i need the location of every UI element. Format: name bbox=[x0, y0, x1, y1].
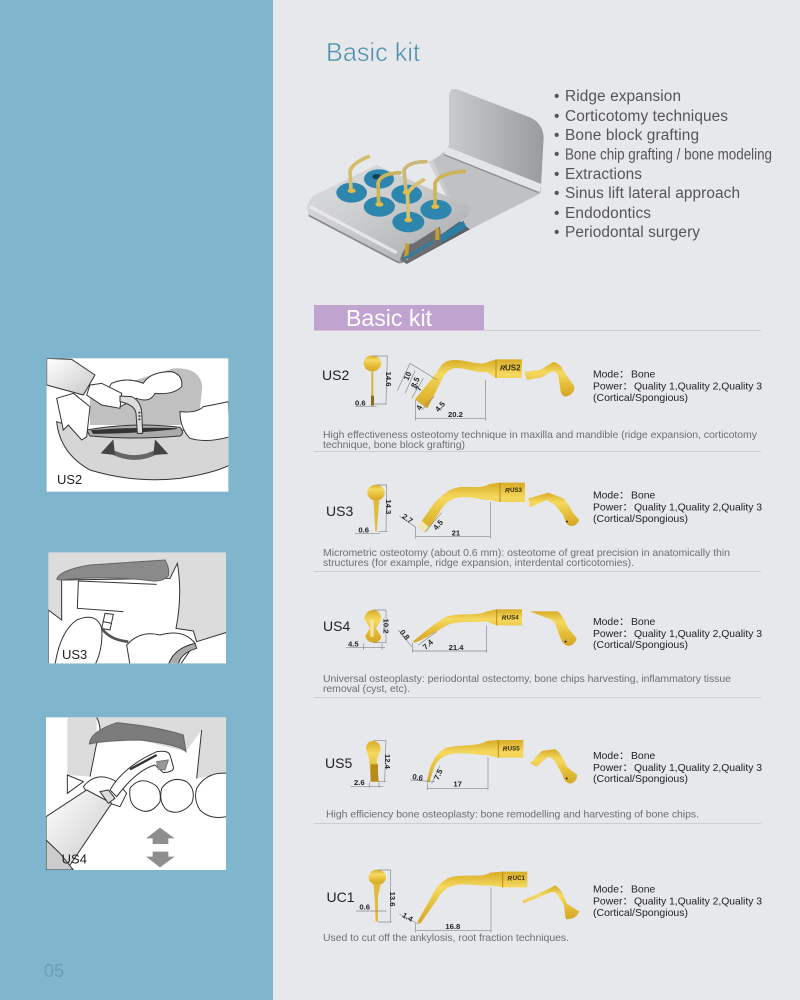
US5 tip drawings and dimensions: 17 bbox=[453, 780, 462, 789]
product image: kit tray bbox=[307, 89, 544, 264]
US4 specs: Quality 1,Quality 2,Quality 3 bbox=[634, 629, 762, 640]
US4 tip drawings and dimensions: US4 bbox=[507, 614, 519, 621]
UC1 specs bbox=[593, 884, 762, 919]
US2 tip drawings and dimensions bbox=[355, 355, 574, 421]
US5 label: US5 bbox=[325, 755, 352, 771]
US3 specs: Quality 1,Quality 2,Quality 3 bbox=[634, 502, 762, 514]
US2 tip drawings and dimensions: 0.6 bbox=[355, 398, 366, 407]
illustration: US4 bbox=[46, 717, 227, 870]
US5 specs: Bone bbox=[631, 751, 655, 762]
US4 tip drawings and dimensions bbox=[346, 609, 577, 653]
US4 description: Universal osteoplasty: periodontal ostectomy, bone chips harvesting, inflammatory tissue bbox=[323, 673, 731, 685]
US3 tip drawings and dimensions: R bbox=[505, 488, 510, 495]
UC1 tip drawings and dimensions: 0.6 bbox=[359, 902, 370, 911]
US3 tip drawings and dimensions: 14.3 bbox=[384, 499, 393, 514]
US3 specs: ： bbox=[619, 490, 629, 502]
US2 tip drawings and dimensions: 10 bbox=[402, 370, 413, 382]
illustration: US2: US2 bbox=[57, 472, 82, 487]
US4 specs: ： bbox=[622, 629, 633, 640]
US5 tip drawings and dimensions: 12.4 bbox=[383, 754, 392, 770]
UC1 tip drawings and dimensions: R bbox=[507, 876, 512, 883]
UC1 specs: ： bbox=[619, 884, 629, 896]
illustration: US3 bbox=[48, 552, 227, 665]
US2 tip drawings and dimensions: US2 bbox=[505, 364, 521, 373]
UC1 specs: Bone bbox=[631, 884, 655, 896]
illustration: US4: US4 bbox=[62, 851, 87, 866]
indications list: Bone block grafting bbox=[565, 127, 699, 144]
indications list: • bbox=[554, 108, 559, 125]
indications list: Periodontal surgery bbox=[565, 224, 700, 241]
US5 tip drawings and dimensions: R bbox=[503, 746, 508, 753]
indications list: • bbox=[554, 205, 559, 222]
US2 specs: Quality 1,Quality 2,Quality 3 bbox=[634, 382, 762, 392]
US2 tip drawings and dimensions: 4.5 bbox=[433, 399, 448, 414]
indications list: Bone chip grafting / bone modeling bbox=[565, 146, 772, 164]
US4 tip drawings and dimensions: 10.2 bbox=[381, 619, 390, 634]
row: US3 bbox=[323, 483, 762, 569]
US2 tip drawings and dimensions: 20.2 bbox=[448, 410, 463, 419]
indications list: Ridge expansion bbox=[565, 88, 681, 105]
page number: 05 bbox=[44, 961, 64, 981]
US4 specs: Bone bbox=[631, 617, 655, 628]
US4 description: removal (cyst, etc). bbox=[323, 683, 410, 695]
US2 specs: ： bbox=[619, 370, 629, 380]
US3 description bbox=[323, 547, 730, 569]
US5 tip drawings and dimensions: 7.5 bbox=[432, 767, 445, 781]
US2 specs bbox=[593, 370, 762, 404]
US3 specs: Bone bbox=[631, 490, 655, 502]
US2 tip drawings and dimensions: 7 bbox=[414, 385, 424, 393]
section heading bar bbox=[314, 305, 484, 331]
US4 tip drawings and dimensions: 21.4 bbox=[449, 643, 464, 652]
UC1 specs: Power bbox=[593, 896, 623, 908]
US5 tip drawings and dimensions: 0.6 bbox=[412, 772, 424, 783]
US3 label: US3 bbox=[326, 503, 353, 519]
illustration: US3: US3 bbox=[62, 647, 87, 662]
US5 specs: Mode bbox=[593, 751, 619, 762]
indications list: • bbox=[554, 127, 559, 144]
UC1 tip drawings and dimensions: 1.4 bbox=[401, 911, 415, 924]
row: UC1 bbox=[323, 870, 762, 944]
indications list bbox=[554, 88, 772, 241]
US4 description bbox=[323, 673, 731, 695]
US5 specs: Power bbox=[593, 763, 623, 774]
US5 specs: Quality 1,Quality 2,Quality 3 bbox=[634, 763, 762, 774]
UC1 label: UC1 bbox=[326, 889, 355, 905]
US2 tip drawings and dimensions: 8.5 bbox=[409, 375, 422, 389]
US5 specs: (Cortical/Spongious) bbox=[593, 774, 688, 785]
US3 specs: (Cortical/Spongious) bbox=[593, 514, 688, 525]
US3 tip drawings and dimensions: 4.5 bbox=[431, 517, 446, 532]
US5 tip drawings and dimensions: 2.6 bbox=[354, 778, 365, 787]
US3 specs: ： bbox=[622, 502, 633, 514]
US5 tip drawings and dimensions bbox=[351, 740, 577, 790]
US2 tip drawings and dimensions: 14.6 bbox=[384, 372, 393, 387]
UC1 specs: Quality 1,Quality 2,Quality 3 bbox=[634, 896, 762, 908]
row: US2 bbox=[322, 355, 762, 451]
US5 specs bbox=[593, 751, 762, 785]
US4 specs bbox=[593, 617, 762, 651]
US3 tip drawings and dimensions: US3 bbox=[510, 487, 523, 494]
US3 tip drawings and dimensions: 21 bbox=[452, 528, 461, 537]
row: US4 bbox=[323, 609, 762, 695]
US5 tip drawings and dimensions: US5 bbox=[508, 745, 520, 752]
US3 specs: Power bbox=[593, 502, 623, 514]
UC1 description: Used to cut off the ankylosis, root fraction techniques. bbox=[323, 932, 569, 944]
indications list: • bbox=[554, 166, 559, 183]
UC1 specs: ： bbox=[622, 896, 633, 908]
blue sidebar bbox=[0, 0, 273, 1000]
UC1 specs: Mode bbox=[593, 884, 619, 896]
US3 specs bbox=[593, 490, 762, 525]
US2 specs: Mode bbox=[593, 370, 619, 380]
US4 specs: Mode bbox=[593, 617, 619, 628]
US3 description: structures (for example, ridge expansion, interdental corticotomies). bbox=[323, 557, 634, 569]
US2 tip drawings and dimensions: 4 bbox=[414, 403, 425, 412]
US4 specs: (Cortical/Spongious) bbox=[593, 640, 688, 651]
UC1 tip drawings and dimensions: 16.8 bbox=[445, 922, 461, 931]
US3 tip drawings and dimensions bbox=[355, 483, 579, 538]
indications list: Sinus lift lateral approach bbox=[565, 185, 740, 202]
US2 specs: (Cortical/Spongious) bbox=[593, 393, 688, 404]
illustration: US2 bbox=[47, 358, 230, 492]
US2 label: US2 bbox=[322, 367, 349, 383]
US5 specs: ： bbox=[622, 763, 633, 774]
row: US5 bbox=[325, 740, 762, 820]
US2 specs: Bone bbox=[631, 370, 655, 380]
UC1 specs: (Cortical/Spongious) bbox=[593, 908, 688, 919]
US4 tip drawings and dimensions: 0.8 bbox=[398, 628, 412, 642]
US2 tip drawings and dimensions: R bbox=[500, 364, 506, 373]
US4 tip drawings and dimensions: R bbox=[502, 615, 507, 622]
indications list: • bbox=[554, 88, 559, 105]
indications list: Corticotomy techniques bbox=[565, 108, 728, 125]
US4 specs: Power bbox=[593, 629, 623, 640]
US5 description: High efficiency bone osteoplasty: bone remodelling and harvesting of bone chips. bbox=[326, 808, 699, 820]
UC1 tip drawings and dimensions: UC1 bbox=[513, 875, 526, 882]
US4 tip drawings and dimensions: 4.5 bbox=[348, 639, 359, 648]
US5 specs: ： bbox=[619, 751, 629, 762]
US2 description bbox=[323, 429, 758, 451]
US2 description: technique, bone block grafting) bbox=[323, 439, 465, 451]
indications list: • bbox=[554, 224, 559, 241]
US4 label: US4 bbox=[323, 618, 350, 634]
US3 tip drawings and dimensions: 0.6 bbox=[358, 526, 369, 535]
indications list: Endodontics bbox=[565, 205, 651, 222]
section heading bar: Basic kit bbox=[346, 305, 433, 331]
UC1 tip drawings and dimensions: 13.6 bbox=[388, 892, 397, 907]
US3 description: Micrometric osteotomy (about 0.6 mm): osteotome of great precision in anatomically thin bbox=[323, 547, 730, 559]
indications list: Extractions bbox=[565, 166, 642, 183]
US3 specs: Mode bbox=[593, 490, 619, 502]
US4 specs: ： bbox=[619, 617, 629, 628]
title: Basic kit bbox=[326, 37, 421, 67]
US2 specs: Power bbox=[593, 382, 623, 392]
US4 tip drawings and dimensions: 7.4 bbox=[421, 637, 435, 651]
US2 specs: ： bbox=[622, 382, 633, 392]
US2 description: High effectiveness osteotomy technique in maxilla and mandible (ridge expansion, corticotomy bbox=[323, 429, 758, 441]
UC1 tip drawings and dimensions bbox=[356, 870, 579, 932]
indications list: • bbox=[554, 146, 559, 163]
US3 tip drawings and dimensions: 2.7 bbox=[401, 512, 414, 525]
indications list: • bbox=[554, 185, 559, 202]
